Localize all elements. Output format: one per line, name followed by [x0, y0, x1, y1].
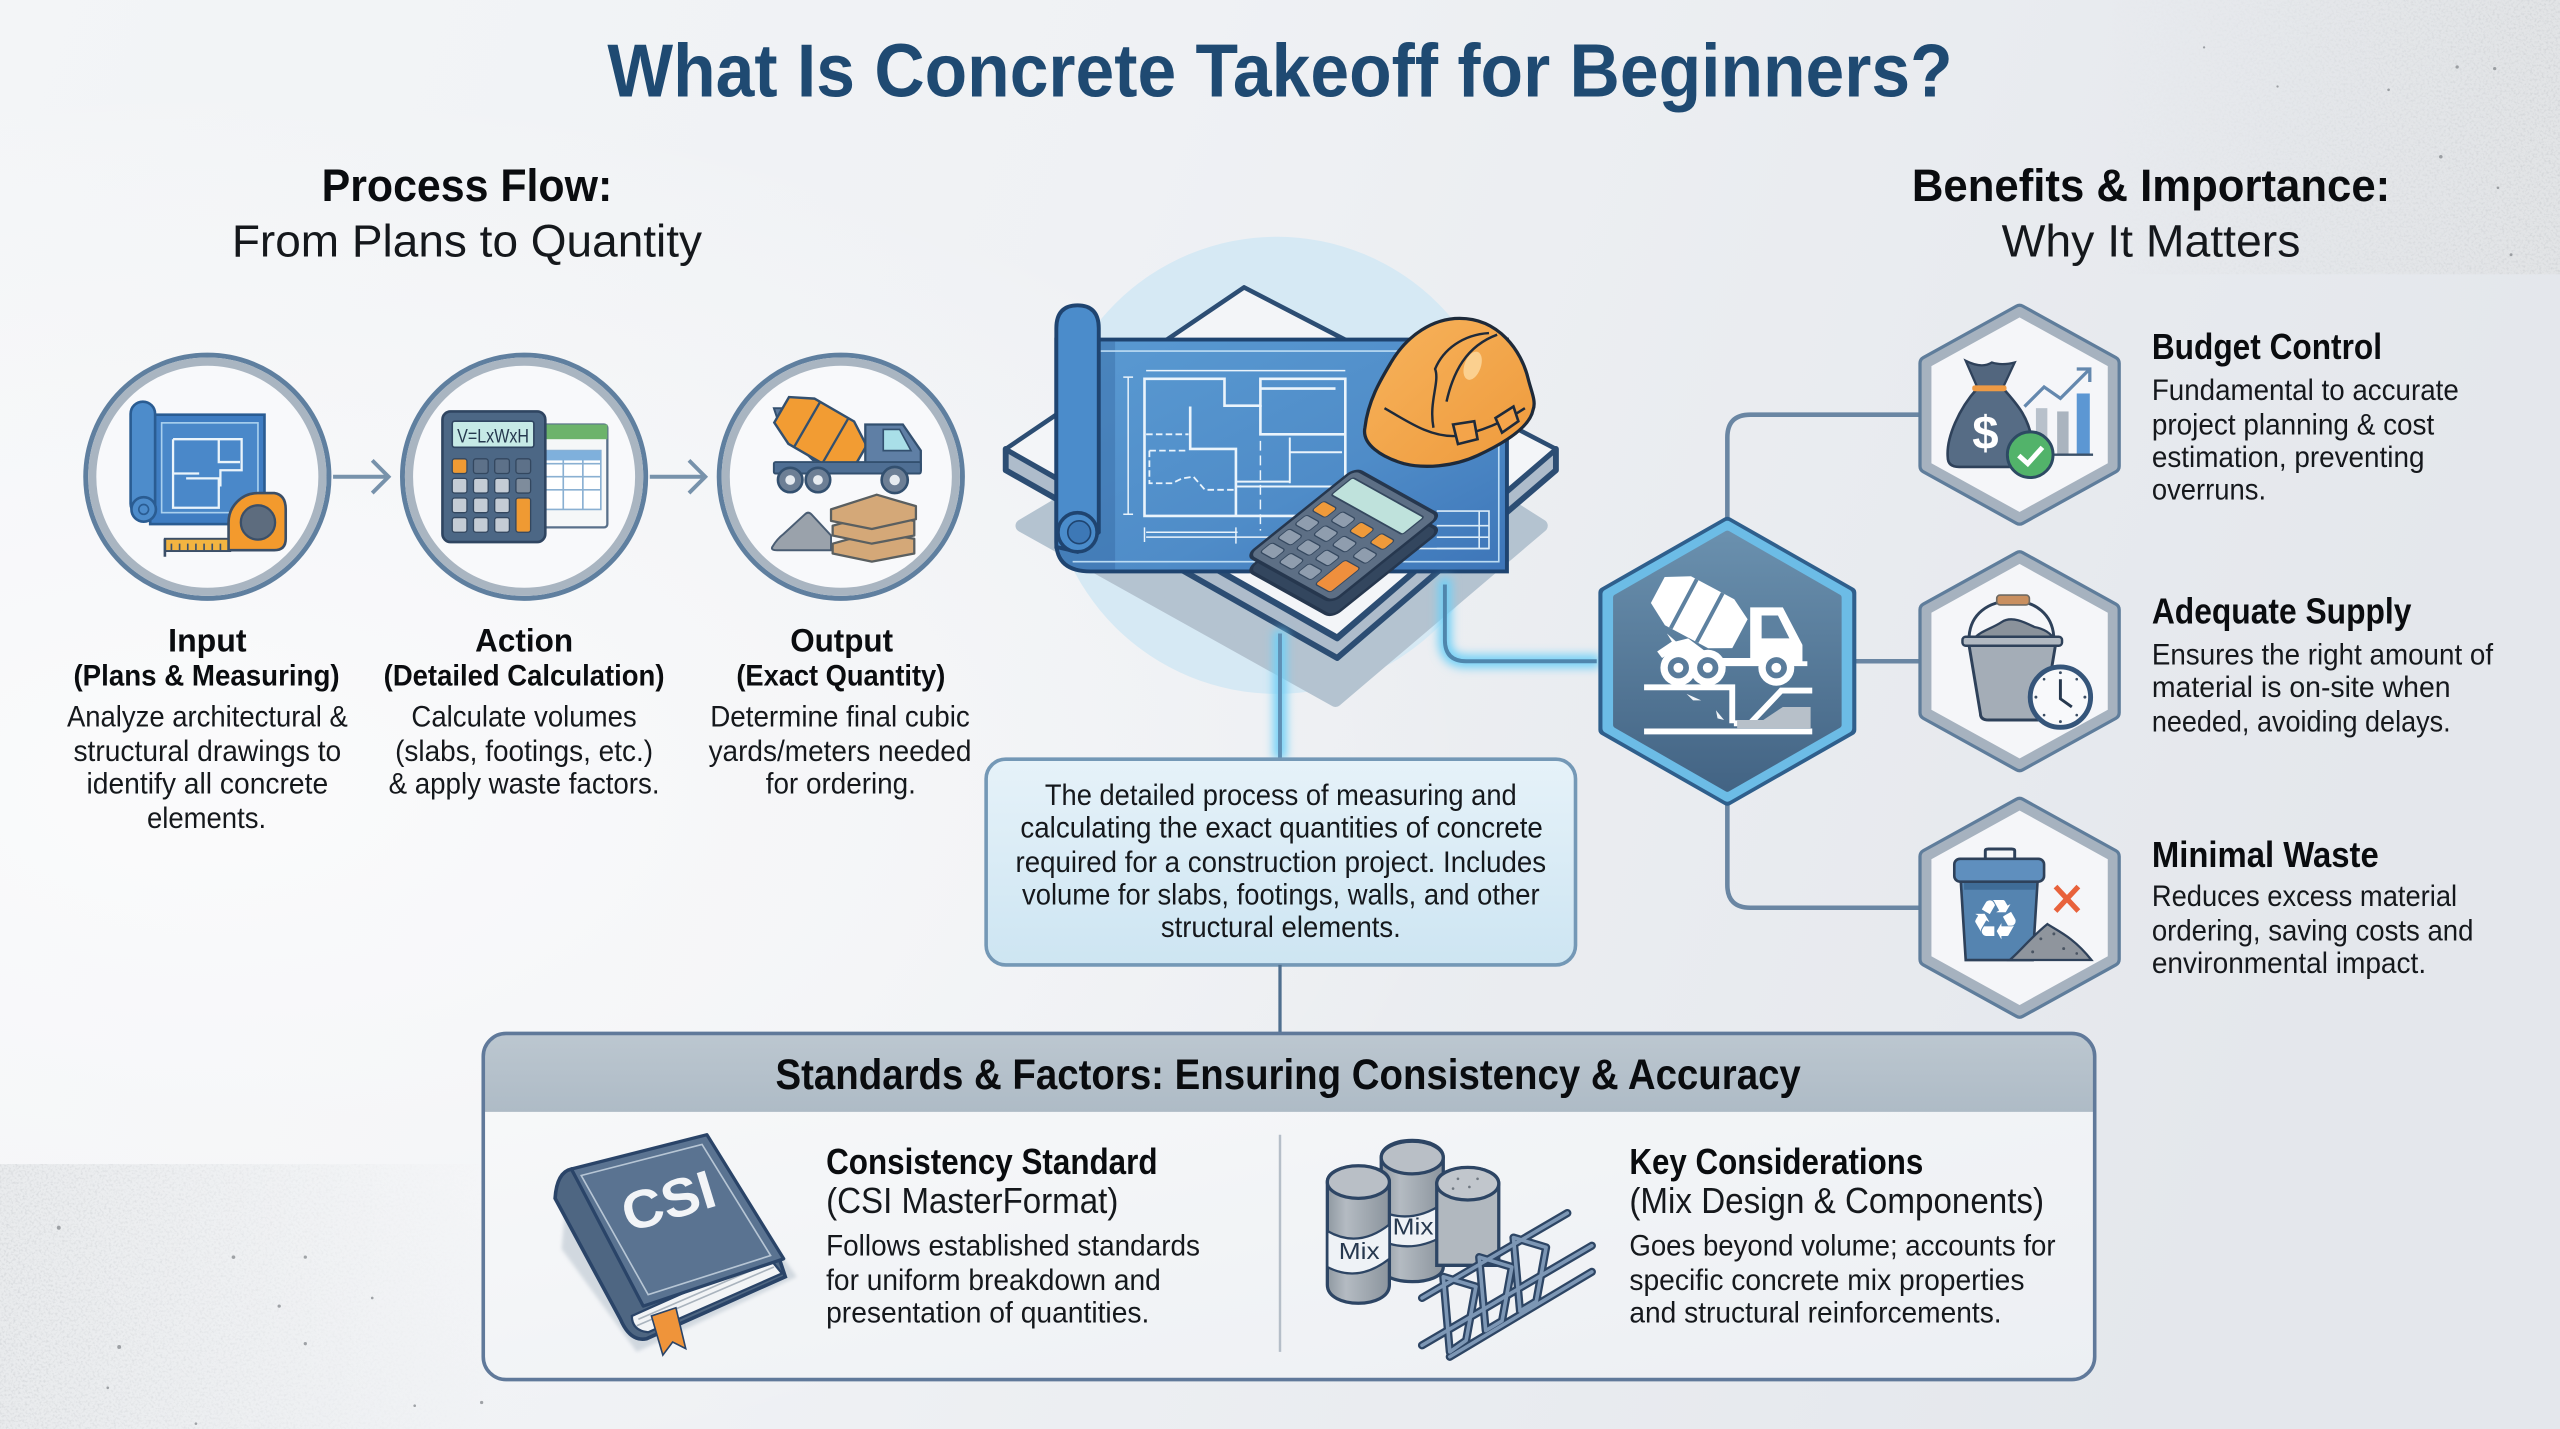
step text: output: yards/meters needed: [709, 735, 971, 768]
step text: output: Determine final cubic: [710, 701, 970, 734]
definition callout: required for a construction project. Includes: [1016, 846, 1546, 879]
connector: callout to standards panel: [1279, 965, 1281, 1035]
text: consistency standard: Follows established standards: [826, 1230, 1200, 1263]
panel heading: Standards & Factors: Ensuring Consistency & Accuracy: [776, 1051, 1801, 1098]
text: key considerations: specific concrete mix properties: [1629, 1264, 2024, 1297]
benefit text: minimal waste: Minimal Waste: [2152, 834, 2379, 875]
step text: input: structural drawings to: [73, 735, 341, 768]
text: key considerations: (Mix Design & Components): [1629, 1180, 2044, 1221]
text: consistency standard: (CSI MasterFormat): [826, 1180, 1118, 1221]
center hexagon: concrete truck icon: [1604, 522, 1851, 800]
heading: process flow: Process Flow:: [322, 160, 612, 211]
panel: standards and factors: [483, 1033, 2095, 1380]
heading: benefits: [1912, 160, 2390, 266]
benefit text: adequate supply: Adequate Supply: [2152, 591, 2411, 632]
benefit hexagon: adequate supply icon: [1927, 558, 2113, 764]
step text: input: (Plans & Measuring): [73, 660, 340, 693]
heading: benefits: Benefits & Importance:: [1912, 160, 2390, 211]
step text: input: identify all concrete: [87, 767, 328, 800]
step text: output: (Exact Quantity): [736, 660, 945, 693]
definition callout: [986, 759, 1576, 965]
benefit hexagon: minimal waste icon: ♻: [1971, 888, 2020, 953]
step: input circle and icon: [86, 355, 329, 598]
step: action circle and icon: V=LxWxH: [457, 425, 529, 447]
heading: process flow: From Plans to Quantity: [232, 215, 702, 266]
connectors: center hexagon to benefits: [1727, 415, 1920, 908]
text: key considerations: [1629, 1141, 2056, 1329]
step text: output: [709, 621, 971, 800]
heading: benefits: Why It Matters: [2002, 215, 2300, 266]
connector: illustration to center hexagon: [1445, 578, 1600, 661]
step text: input: Input: [168, 621, 247, 658]
title: What Is Concrete Takeoff for Beginners?: [607, 28, 1953, 112]
benefit hexagon: budget control icon: $: [1972, 407, 1999, 460]
text: key considerations: and structural reinforcements.: [1629, 1296, 2002, 1329]
definition callout: structural elements.: [1161, 911, 1401, 944]
text: key considerations: Key Considerations: [1629, 1141, 1923, 1182]
benefit hexagon: budget control icon: [1927, 312, 2113, 518]
central illustration: blueprint, hard hat, calculator: [1006, 237, 1556, 700]
step text: output: for ordering.: [766, 767, 916, 800]
icon: concrete cylinders and rebar: Mix: [1393, 1213, 1434, 1239]
step text: input: Analyze architectural &: [67, 701, 348, 734]
connector: illustration to definition box: [1276, 630, 1284, 759]
benefit text: minimal waste: ordering, saving costs and: [2152, 914, 2473, 947]
arrow: action to output: [650, 460, 705, 493]
definition callout: volume for slabs, footings, walls, and other: [1022, 878, 1540, 911]
benefit text: budget control: Fundamental to accurate: [2152, 374, 2459, 407]
text: consistency standard: [826, 1141, 1200, 1329]
step text: action: (Detailed Calculation): [384, 660, 664, 693]
step text: action: Action: [475, 621, 573, 658]
benefit text: adequate supply: material is on-site when: [2152, 671, 2451, 704]
step text: action: [384, 621, 664, 800]
benefit text: adequate supply: needed, avoiding delays.: [2152, 705, 2451, 738]
definition callout: The detailed process of measuring and: [1045, 779, 1517, 812]
benefit text: minimal waste: environmental impact.: [2152, 947, 2426, 980]
icon: CSI book: CSI: [615, 1159, 723, 1244]
benefit text: adequate supply: Ensures the right amount of: [2152, 638, 2494, 671]
benefit text: budget control: estimation, preventing: [2152, 441, 2424, 474]
step text: action: (slabs, footings, etc.): [395, 735, 653, 768]
text: key considerations: Goes beyond volume; accounts for: [1629, 1230, 2056, 1263]
icon: CSI book: [555, 1135, 797, 1355]
text: consistency standard: Consistency Standard: [826, 1141, 1158, 1182]
icon: concrete cylinders and rebar: [1327, 1140, 1592, 1357]
benefit text: budget control: Budget Control: [2152, 326, 2382, 367]
text: consistency standard: for uniform breakdown and: [826, 1264, 1161, 1297]
benefit text: budget control: overruns.: [2152, 474, 2266, 507]
step text: action: & apply waste factors.: [389, 767, 660, 800]
definition callout: calculating the exact quantities of concrete: [1020, 812, 1543, 845]
benefit text: minimal waste: Reduces excess material: [2152, 880, 2457, 913]
step text: input: [67, 621, 348, 835]
step text: output: Output: [790, 621, 893, 658]
benefit text: adequate supply: [2152, 591, 2494, 738]
icon: concrete cylinders and rebar: Mix: [1339, 1238, 1380, 1264]
step text: action: Calculate volumes: [411, 701, 637, 734]
heading: process flow: [232, 160, 702, 266]
benefit hexagon: minimal waste icon: [1927, 805, 2113, 1011]
text: consistency standard: presentation of quantities.: [826, 1296, 1149, 1329]
benefit text: budget control: [2152, 326, 2459, 507]
step text: input: elements.: [147, 802, 266, 835]
benefit text: minimal waste: [2152, 834, 2473, 980]
step: action circle and icon: [402, 355, 646, 598]
benefit text: budget control: project planning & cost: [2152, 408, 2434, 441]
arrow: input to action: [333, 460, 389, 493]
step: output circle and icon: [719, 355, 962, 598]
